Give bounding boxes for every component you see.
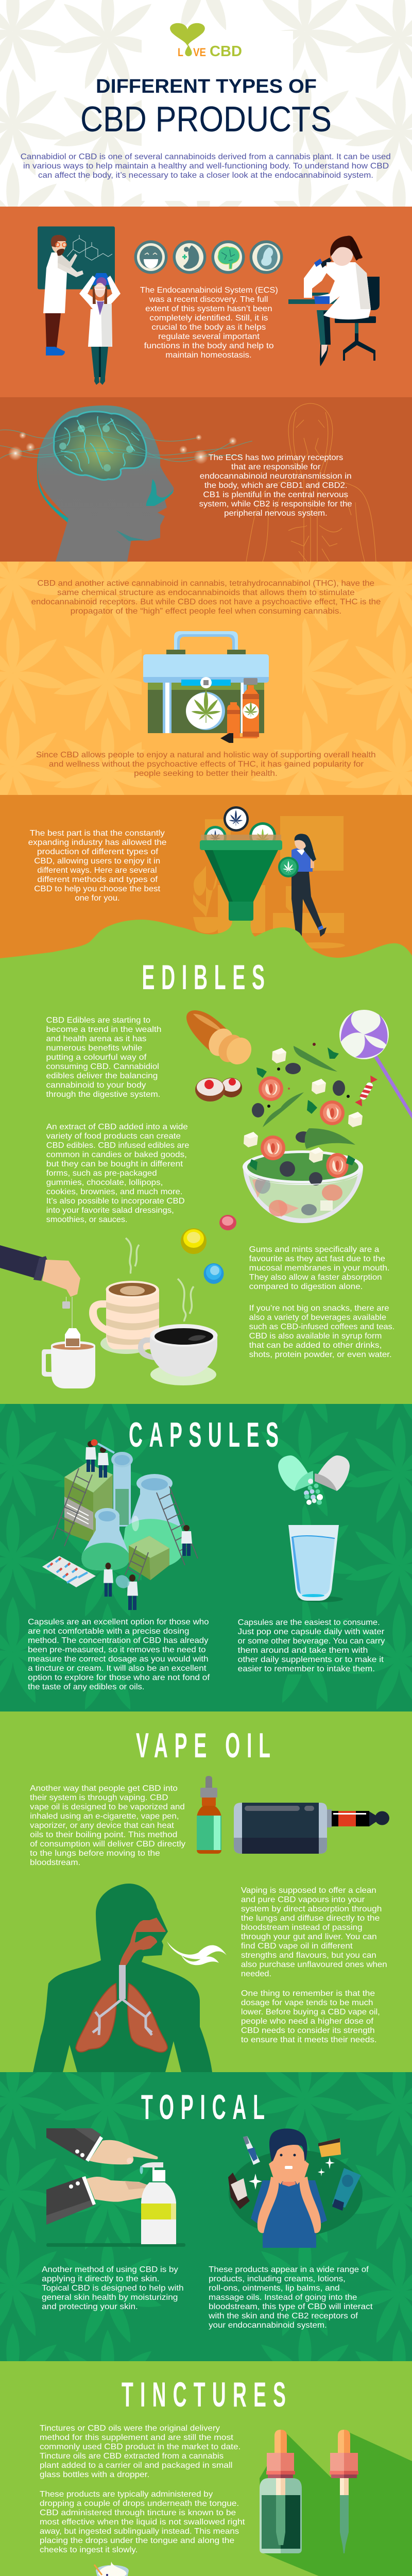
illustration: falling salad ingredients — [244, 1043, 363, 1149]
text: clean vapour: also purchase unflavoured ones when — [241, 1960, 387, 1969]
text: CBD and THC chemistry — [31, 579, 381, 616]
illustration: lollipop — [339, 1010, 412, 1119]
text: vape dosage — [241, 1989, 380, 2044]
text: tincture administration: These products are typically administered by — [40, 2490, 213, 2499]
text: clean vapour: and pure CBD vapours into your — [241, 1895, 365, 1904]
text: extract of CBD — [46, 1123, 190, 1224]
text: tincture administration: dropping a couple of drops underneath the tongue. — [40, 2499, 239, 2508]
text: popularity of CBD: Since CBD allows people to enjoy a natural and holistic way of supporting overall health — [36, 751, 376, 759]
illustration: isometric lab with flasks and scientists — [42, 1439, 198, 1610]
text: gums and mints: mucosal membranes in your mouth. — [249, 1264, 390, 1273]
text: vaping intro: to the lungs before moving to the — [30, 1849, 160, 1858]
illustration: woman at microscope — [288, 236, 380, 366]
text: beverages: that can be added to other drinks, — [249, 1341, 382, 1350]
logo: Love CBD: L — [178, 46, 183, 59]
icons: smile, stomach, brain, fetus — [134, 240, 283, 274]
text: clean vapour: the lungs and diffuse directly to the — [241, 1914, 380, 1923]
logo: Love CBD — [170, 23, 242, 60]
text: topical right: roll-ons, ointments, lip balms, and — [209, 2284, 340, 2293]
text: extract of CBD: CBD edibles. CBD infused edibles are — [46, 1141, 190, 1150]
illustration: funnel with tokens — [200, 806, 282, 921]
illustration: bread — [186, 1010, 256, 1069]
text: extract of CBD: cookies, brownies, and much more. — [46, 1188, 183, 1196]
text: best part: expanding industry has allowed the — [28, 838, 167, 847]
text: gums and mints: favourite as they act fast due to the — [249, 1255, 385, 1263]
illustration: vascular body outline — [246, 403, 376, 562]
text: ECS receptors: peripheral nervous system. — [224, 509, 328, 518]
text: topical right: These products appear in a wide range of — [209, 2265, 369, 2274]
text: capsules easy to consume — [238, 1618, 385, 1673]
text: CBD edibles intro: numerous benefits while — [46, 1044, 142, 1053]
illustration: gum candies — [181, 1215, 236, 1284]
text: capsules easy to consume: easier to remember to intake them. — [238, 1665, 375, 1673]
text: ECS discovery: extent of this system hasn’t been — [145, 304, 272, 313]
text: capsules precise dosing: measure the correct dosage as you would with — [28, 1655, 209, 1664]
text: extract of CBD: gummies, chocolate, lollipops, — [46, 1178, 163, 1187]
text: extract of CBD: An extract of CBD added into a wide — [46, 1123, 188, 1131]
title: CBD PRODUCTS — [80, 99, 332, 139]
text: CBD edibles intro: putting a colourful way of — [46, 1053, 147, 1062]
text: vaping intro: oils to their boiling point. This method — [30, 1831, 177, 1839]
illustration: hand dipping tea bag — [0, 1245, 80, 1329]
heading: topical: TOPICAL — [141, 2087, 265, 2127]
text: topical left: Topical CBD is designed to help with — [42, 2284, 184, 2293]
text: best part: CBD to help you choose the best — [34, 885, 161, 893]
text: vape dosage: One thing to remember is that the — [241, 1989, 375, 1998]
text: tincture administration — [40, 2490, 245, 2554]
text: best part: production of different types of — [37, 848, 159, 856]
illustration: CBD case with bottles — [143, 631, 269, 743]
intro text: in various ways to help maintain a healthy and well-functioning body. To understand how CBD — [23, 162, 389, 171]
illustration: woman with token — [278, 834, 327, 937]
text: gums and mints — [249, 1245, 390, 1291]
text: capsules precise dosing: a tincture or cream. It will also be an excellent — [28, 1664, 207, 1673]
text: tincture administration: cheeks to ingest it slowly. — [40, 2546, 138, 2554]
text: clean vapour: needed. — [241, 1970, 271, 1978]
text: vaping intro: inhaled using an e-cigarette, vape pen, — [30, 1812, 179, 1821]
text: vaping intro: bloodstream. — [30, 1858, 80, 1867]
text: topical left — [42, 2265, 184, 2311]
illustration: female scientist holding flask — [79, 273, 121, 385]
panel: product funnel — [0, 795, 412, 960]
blister pack — [42, 1556, 96, 1587]
panel: edibles — [0, 920, 412, 1404]
text: capsules precise dosing: option to explore for those who are not fond of — [28, 1673, 210, 1682]
text: ECS receptors: The ECS has two primary receptors — [209, 453, 343, 462]
illustration: opening capsule over glass of water — [278, 1455, 350, 1602]
illustration: head silhouette with brain — [37, 405, 174, 562]
text: beverages: shots, protein powder, or even water. — [249, 1350, 392, 1359]
illustration: vape oil bottle — [197, 1776, 221, 1854]
text: ECS discovery: regulate several important — [158, 332, 260, 341]
text: capsules easy to consume: other daily supplements or to make it — [238, 1655, 384, 1664]
text: capsules easy to consume: or some other beverage. You can carry — [238, 1637, 385, 1646]
text: topical right: products, including creams, lotions, — [209, 2275, 346, 2283]
text: capsules precise dosing: are not comfortable with a precise dosing — [28, 1627, 189, 1636]
text: ECS discovery: maintain homeostasis. — [165, 351, 252, 360]
illustration: tincture bottle — [260, 2430, 302, 2553]
text: ECS receptors: system, while CB2 is responsible for the — [199, 500, 352, 509]
text: ECS receptors: endocannabinoid neurotransmission in — [200, 472, 352, 481]
text: topical left: applying it directly to the skin. — [42, 2275, 160, 2283]
text: ECS receptors: the body, which are CBD1 and CBD2. — [204, 481, 347, 490]
text: popularity of CBD — [36, 751, 376, 778]
illustration: hands with pump bottle — [46, 2128, 185, 2247]
text: popularity of CBD: and wellness without the psychoactive effects of THC, it has gained popularity for — [49, 760, 364, 769]
text: clean vapour: system by direct absorption through — [241, 1905, 382, 1913]
text: topical left: general skin health by moisturizing — [42, 2293, 178, 2302]
panel: capsules — [0, 1404, 412, 1711]
illustration: black coffee cup — [138, 1324, 217, 1385]
text: topical right: bloodstream, this type of CBD will interact — [209, 2302, 373, 2311]
text: beverages: If you’re not big on snacks, there are — [249, 1304, 389, 1313]
panel: ECS receptors — [0, 397, 412, 562]
text: topical right — [208, 2265, 373, 2330]
text: tincture description: plant added to a carrier oil and packaged in small — [40, 2461, 233, 2470]
text: best part — [28, 829, 167, 903]
text: gums and mints: compared to digestion alone. — [249, 1282, 363, 1291]
illustration: neural signal waves — [0, 424, 252, 462]
text: capsules easy to consume: Just pop one capsule daily with water — [238, 1628, 385, 1636]
scientists — [85, 1439, 192, 1610]
text: beverages — [249, 1304, 394, 1359]
text: CBD edibles intro: become a trend in the wealth — [46, 1025, 162, 1034]
text: tincture administration: away, but ingested sublingually instead. This means — [40, 2527, 239, 2536]
text: ECS receptors: that are responsible for — [231, 463, 321, 471]
panel: vape oil — [0, 1711, 412, 2072]
text: ECS discovery — [140, 286, 278, 360]
heading: tinctures: TINCTURES — [122, 2375, 286, 2414]
illustration: person with lungs — [33, 1884, 212, 2072]
illustration: brain — [54, 412, 146, 480]
text: CBD and THC chemistry: endocannabinoid receptors. But while CBD does not have a psychoactive effect, THC is the — [31, 598, 381, 606]
text: capsules precise dosing — [28, 1618, 210, 1691]
text: best part: The best part is that the constantly — [30, 829, 165, 838]
illustration: donuts — [195, 1078, 242, 1101]
illustration: candy — [355, 1076, 377, 1106]
text: beverages: such as CBD-infused coffees and teas. — [249, 1323, 394, 1331]
text: CBD edibles intro: CBD Edibles are starting to — [46, 1016, 150, 1025]
text: topical left: and protecting your skin. — [42, 2302, 138, 2311]
text: capsules easy to consume: them around and take them with — [238, 1646, 368, 1655]
text: CBD edibles intro: and health arena as it has — [46, 1035, 146, 1043]
text: best part: different methods and types of — [37, 875, 158, 884]
text: CBD and THC chemistry: CBD and another active cannabinoid in cannabis, tetrahydrocannabinol (THC), have the — [37, 579, 374, 588]
text: tincture description: commonly used CBD product in the market to date. — [40, 2443, 241, 2451]
logo: Love CBD: VE — [193, 46, 206, 59]
panel: topical — [0, 2072, 412, 2361]
text: extract of CBD: but they can be bought in different — [46, 1160, 183, 1168]
icon: glowing nodes — [8, 432, 237, 464]
text: clean vapour: through your gut and liver. You can — [241, 1933, 377, 1941]
intro text — [21, 152, 391, 180]
text: CBD and THC chemistry: same chemical structure as endocannabinoids that allows them to stimulate — [57, 588, 355, 597]
illustration: open mouth with foods — [38, 2562, 180, 2576]
text: best part: different ways. Here are several — [37, 866, 157, 875]
text: best part: one for you. — [75, 894, 120, 903]
heading: vape oil: VAPE OIL — [136, 1725, 270, 1765]
text: clean vapour: find CBD vape oil in different — [241, 1942, 353, 1951]
illustration: vape device — [234, 1803, 389, 1854]
text: ECS receptors — [199, 453, 352, 518]
text: vape dosage: lower. Before buying a CBD vape oil, — [241, 2008, 380, 2016]
text: ECS discovery: functions in the body and help to — [144, 342, 274, 350]
text: extract of CBD: smoothies, or sauces. — [46, 1215, 128, 1224]
text: vape dosage: CBD needs to consider its strength — [241, 2026, 375, 2035]
heading: edibles: EDIBLES — [142, 957, 265, 997]
decorative steam — [126, 1238, 194, 1321]
text: tincture administration: CBD administered through tincture is known to be — [40, 2509, 236, 2517]
illustration: man applying skincare — [228, 2129, 363, 2248]
panel: endocannabinoid discovery — [0, 207, 412, 397]
illustration: dropper — [330, 2430, 358, 2553]
logo: Love CBD: CBD — [210, 43, 242, 60]
text: clean vapour: Vaping is supposed to offer a clean — [241, 1886, 376, 1895]
text: tincture description: Tinctures or CBD oils were the original delivery — [40, 2424, 220, 2433]
title: DIFFERENT TYPES OF — [96, 76, 317, 97]
text: tincture administration: most effective when the liquid is not swallowed right — [40, 2518, 245, 2527]
intro text: Cannabidiol or CBD is one of several cannabinoids derived from a cannabis plant. It can be used — [21, 152, 391, 161]
text: ECS receptors: CB1 is plentiful in the central nervous — [203, 490, 348, 499]
text: capsules precise dosing: Capsules are an excellent option for those who — [28, 1618, 209, 1626]
text: beverages: CBD is also available in syrup form — [249, 1332, 382, 1341]
text: capsules precise dosing: method. The concentration of CBD has already — [28, 1636, 209, 1645]
illustration: tea mug — [42, 1328, 95, 1388]
text: vaping intro: their system is through vaping. CBD — [30, 1793, 168, 1802]
text: vape dosage: to ensure that it meets their needs. — [241, 2036, 377, 2044]
text: extract of CBD: It’s also possible to incorporate CBD — [46, 1197, 185, 1206]
text: topical right: your endocannabinoid system. — [209, 2321, 327, 2330]
text: ECS discovery: The Endocannabinoid System (ECS) — [140, 286, 278, 295]
text: vape dosage: dosage for vape tends to be much — [241, 1998, 373, 2007]
panel: header — [0, 0, 412, 207]
text: capsules precise dosing: been pre-measured, so it removes the need to — [28, 1646, 206, 1654]
text: CBD edibles intro — [46, 1016, 162, 1099]
text: extract of CBD: common in candies or baked goods, — [46, 1150, 187, 1159]
text: ECS discovery: completely identified. Still, it is — [149, 314, 268, 323]
panel: CBD and THC — [0, 562, 412, 795]
intro text: can affect the body, it’s necessary to take a closer look at the endocannabinoid system. — [38, 171, 373, 180]
text: gums and mints: They also allow a faster absorption — [249, 1273, 382, 1282]
text: clean vapour: strengths and flavours, but you can — [241, 1951, 376, 1960]
text: vaping intro: Another way that people get CBD into — [30, 1784, 178, 1793]
text: topical left: Another method of using CBD is by — [42, 2265, 178, 2274]
illustration: latte mug — [89, 1281, 159, 1354]
text: clean vapour: bloodstream instead of passing — [241, 1923, 363, 1932]
text: tincture description: glass bottles with a dropper. — [40, 2470, 149, 2479]
panel: tinctures — [0, 2361, 412, 2576]
text: CBD edibles intro: consuming CBD. Cannabidiol — [46, 1062, 159, 1071]
text: CBD edibles intro: cannabinoid to your body — [46, 1081, 146, 1090]
text: CBD and THC chemistry: propagator of the “high” effect people feel when consuming cannabis. — [71, 607, 341, 616]
text: vaping intro: of consumption will deliver CBD directly — [30, 1840, 185, 1849]
text: ECS discovery: crucial to the body as it helps — [151, 323, 266, 332]
illustration: male scientist at chalkboard — [38, 227, 115, 355]
text: topical right: with the skin and the CB2 receptors of — [208, 2312, 358, 2320]
text: best part: CBD, allowing users to enjoy it in — [34, 857, 160, 866]
ladders — [53, 1468, 198, 1581]
text: tincture description: Tincture oils are CBD extracted from a cannabis — [40, 2452, 224, 2461]
text: vaping intro: vape oil is designed to be vaporized and — [30, 1803, 185, 1811]
text: vaping intro: vaporizer, or any device that can heat — [30, 1821, 174, 1830]
heading: capsules: CAPSULES — [129, 1415, 279, 1454]
text: vaping intro — [30, 1784, 185, 1867]
text: extract of CBD: forms, such as pre-packaged — [46, 1169, 157, 1178]
title — [80, 76, 332, 139]
text: vape dosage: people who need a higher dose of — [241, 2017, 374, 2026]
decorative background furniture — [193, 816, 345, 948]
text: tincture description: method for this supplement and are still the most — [40, 2433, 234, 2442]
text: ECS discovery: was a recent discovery. The full — [149, 295, 268, 304]
text: capsules easy to consume: Capsules are the easiest to consume. — [238, 1618, 380, 1627]
text: tincture description — [40, 2424, 241, 2479]
text: CBD edibles intro: through the digestive system. — [46, 1090, 160, 1099]
text: tincture administration: placing the drops under the tongue and along the — [40, 2536, 234, 2545]
text: beverages: also a variety of beverages available — [249, 1313, 386, 1322]
illustration: long shadow — [260, 2431, 412, 2576]
text: popularity of CBD: people seeking to better their health. — [134, 769, 278, 778]
text: capsules precise dosing: the taste of any edibles or oils. — [28, 1683, 145, 1691]
text: topical right: massage oils. Instead of going into the — [209, 2293, 357, 2302]
text: CBD edibles intro: edibles deliver the balancing — [46, 1072, 158, 1080]
text: gums and mints: Gums and mints specifically are a — [249, 1245, 379, 1254]
text: clean vapour — [241, 1886, 387, 1978]
text: extract of CBD: into your favorite salad dressings, — [46, 1206, 174, 1215]
text: extract of CBD: variety of food products can create — [46, 1132, 181, 1141]
illustration: vapour swooshes — [167, 1941, 227, 1965]
illustration: salad bowl — [243, 1136, 363, 1223]
